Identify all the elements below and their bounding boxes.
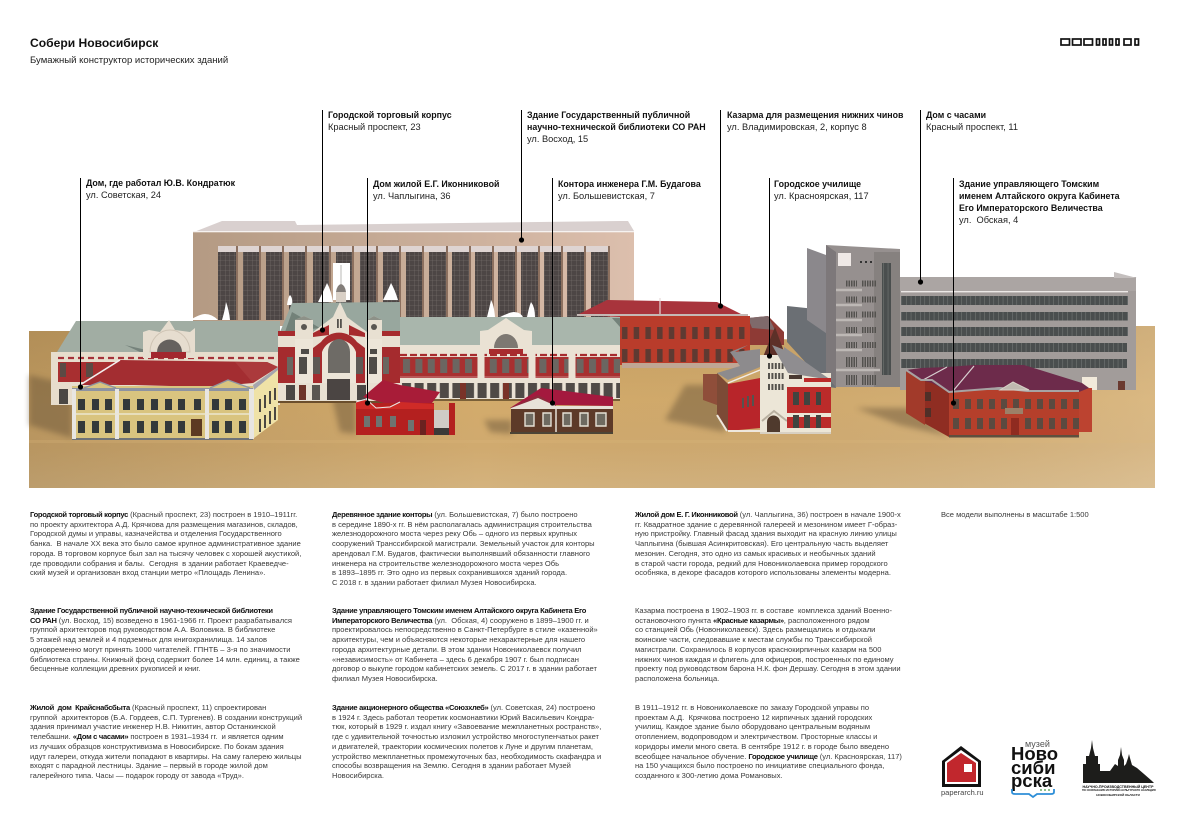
- label: Kondratyuk house: ул. Советская, 24: [86, 190, 161, 200]
- logo: paperarch: [941, 746, 984, 797]
- text: clock house: Жилой дом Крайснабсбыта (Красный проспект, 11) спроектирован: [30, 703, 266, 712]
- text: wooden office: арендовал Г.М. Будагов, фактически выполнявший обязанности главного: [332, 549, 590, 558]
- text: barracks: магистрали. Сохранилось 8 корпусов краснокирпичных казарм на 500: [635, 645, 881, 654]
- logo: scientific production centre: ПО СОХРАНЕНИЮ ИСТОРИКО-КУЛЬТУРНОГО НАСЛЕДИЯ: [1082, 789, 1156, 792]
- text: clock house: входят с парадной лестницы. Здание – первый в городе жилой дом: [30, 761, 268, 770]
- label: barracks: Казарма для размещения нижних чинов: [727, 110, 903, 120]
- leader: contractor's office: [550, 178, 555, 406]
- text: wooden office: в 1893–1895 гг. Это одно из первых сохранившихся зданий города.: [332, 568, 567, 577]
- text: Soyuzkhleb: в 1924 г. Здесь работал теоретик космонавтики Юрий Васильевич Кондра-: [332, 713, 594, 722]
- building: trade corps left wing: [51, 320, 280, 405]
- text: city school: проектам А.Д. Крячкова построено 12 кирпичных зданий городских: [635, 713, 872, 722]
- leader: Ikonnikova house: [365, 178, 370, 406]
- text: trade corps: [30, 510, 301, 577]
- text: trade corps: Городской торговый корпус (Красный проспект, 23) построен в 1910–1911гг.: [30, 510, 297, 519]
- text: barracks: нижних чинов каждая и флигель для офицеров, построенных по единому: [635, 655, 894, 664]
- building: trade corps central block: [278, 265, 400, 403]
- label: clock house: [926, 110, 1018, 132]
- logo: paperarch: paperarch.ru: [941, 788, 984, 797]
- title: Собери Новосибирск: [30, 36, 158, 50]
- text: Soyuzkhleb: способы возвращения на Землю. Сегодня в здании работает Музей: [332, 761, 571, 770]
- text: city school: В 1911–1912 гг. в Новониколаевске по заказу Городской управы по: [635, 703, 869, 712]
- leader: clock house: [918, 110, 923, 285]
- label: Altai Okrug office: Его Императорского Величества: [959, 203, 1103, 213]
- text: clock house: здания принимал участие инженер Н.В. Никитин, автор Останкинской: [30, 722, 276, 731]
- text: trade corps: где проводили собрания и балы. Сегодня в здании работает Краеведче-: [30, 559, 289, 568]
- label: barracks: [727, 110, 904, 132]
- logo: Museum of Novosibirsk: рска: [1011, 770, 1052, 791]
- cupola: [336, 265, 346, 302]
- text: Altai Okrug office: архитектуры, чем и объясняются некоторые нехарактерные для нашего: [332, 635, 585, 644]
- text: Ikonnikova house: ную пристройку. Главный фасад здания выходит на красную линию улицы: [635, 529, 897, 538]
- text: library: библиотека страны. Книжный фонд содержит более 14 млн. единиц, а также: [30, 655, 300, 664]
- text: city school: всеобщее начальное обучение. Городское училище (ул. Красноярская, 117): [635, 752, 902, 761]
- label: clock house: Дом с часами: [926, 110, 986, 120]
- label: trade corps: Городской торговый корпус: [328, 110, 452, 120]
- text: clock house: идут галереи, откуда жители попадают в квартиры. На саму галерею жильцы: [30, 752, 302, 761]
- label: Altai Okrug office: ул. Обская, 4: [959, 215, 1018, 225]
- building: yellow house Kondratyuk: [72, 360, 278, 440]
- label: barracks: ул. Владимировская, 2, корпус 8: [727, 122, 867, 132]
- leader: trade corps: [320, 110, 325, 333]
- building: red Altai Okrug office: [906, 365, 1092, 438]
- text: Soyuzkhleb: Здание акционерного общества «Союзхлеб» (ул. Советская, 24) построено: [332, 703, 595, 712]
- label: library: ул. Восход, 15: [527, 134, 588, 144]
- text: barracks: расположена больница.: [635, 674, 719, 683]
- text: wooden office: инженера на строительстве железнодорожного моста через Обь: [332, 559, 559, 568]
- text: trade corps: ский музей и организован вход станции метро «Площадь Ленина».: [30, 568, 265, 577]
- leader: library: [519, 110, 524, 243]
- text: library: одновременно могут принять 1000 читателей. ГПНТБ – 3-я по значимости: [30, 645, 291, 654]
- building: city school: [703, 327, 831, 434]
- arched dormer: [480, 318, 532, 354]
- white gaps behind central roof: [190, 263, 535, 320]
- leader: Altai Okrug office: [951, 178, 956, 406]
- text: barracks: [635, 606, 901, 683]
- text: city school: отоплением, водопроводом и электричеством. Просторные классы и: [635, 732, 877, 741]
- text: Altai Okrug office: [332, 606, 598, 683]
- text: clock house: из лучших образцов конструктивизма в Новосибирске. По бокам здания: [30, 742, 284, 751]
- label: contractor's office: ул. Большевистская, 7: [558, 191, 655, 201]
- text: city school: созданного к 300-летию дома Романовых.: [635, 771, 783, 780]
- logo: scientific production centre: НОВОСИБИРСКОЙ ОБЛАСТИ: [1096, 793, 1140, 797]
- label: school: [774, 179, 869, 201]
- label: library: научно-технической библиотеки СО РАН: [527, 122, 706, 132]
- text: trade corps: по проекту архитектора А.Д. Крячкова для размещения магазинов, складов,: [30, 520, 298, 529]
- label: library: Здание Государственный публичной: [527, 110, 690, 120]
- label: Kondratyuk house: [86, 178, 235, 200]
- text: library: [30, 606, 300, 673]
- clock face: [838, 253, 851, 266]
- library windows: [218, 246, 609, 320]
- logo: scientific production centre: НАУЧНО-ПРОИЗВОДСТВЕННЫЙ ЦЕНТР: [1082, 785, 1153, 789]
- label: clock house: Красный проспект, 11: [926, 122, 1018, 132]
- text: barracks: Казарма построена в 1902–1903 гг. в составе комплекса зданий Военно-: [635, 606, 892, 615]
- text: library: Здание Государственной публичной научно-технической библиотеки: [30, 606, 273, 615]
- label: library: [527, 110, 706, 144]
- text: clock house: телебашни. «Дом с часами» построен в 1931–1934 гг. и является одним: [30, 732, 284, 741]
- text: trade corps: Городской думы и управы, казначейства и отделения Государственного: [30, 529, 282, 538]
- label: Kondratyuk house: Дом, где работал Ю.В. Кондратюк: [86, 178, 235, 188]
- text: library: 5 этажей над землей и 4 подземных для книгохранилища. 14 залов: [30, 635, 267, 644]
- arched dormer: [143, 320, 195, 358]
- text: Ikonnikova house: в старой части города, редкий для Новониколаевска пример городского: [635, 559, 888, 568]
- text: Soyuzkhleb: устройство межпланетных промежуточных баз, необходимость скафандра и: [332, 752, 601, 761]
- label: trade corps: Красный проспект, 23: [328, 122, 421, 132]
- text: Altai Okrug office: договор о выкупе городом кабинетских земель. С 2017 г. в здании работает: [332, 664, 597, 673]
- label: Ikonnikova house: ул. Чаплыгина, 36: [373, 191, 451, 201]
- text: Soyuzkhleb: [332, 703, 601, 780]
- leader lines with dots: [78, 110, 956, 406]
- text: library: СО РАН (ул. Восход, 15) возведено в 1961-1966 гг. Проект разрабатывался: [30, 616, 292, 625]
- text: trade corps: банка. В начале XX века это было самое крупное административное здание: [30, 539, 301, 548]
- building: clock house (constructivist): [787, 245, 1137, 390]
- label: Ikonnikova house: Дом жилой Е.Г. Иконниковой: [373, 179, 499, 189]
- text: city school: коридоры имели много света. В сентябре 1912 г. в городе было введено: [635, 742, 889, 751]
- text: Altai Okrug office: Императорского Величества (ул. Обская, 4) сооружено в 1899–1900 гг. и: [332, 616, 589, 625]
- label: school: Городское училище: [774, 179, 861, 189]
- leader: school: [767, 178, 772, 359]
- text: wooden office: Деревянное здание конторы (ул. Большевистская, 7) было построено: [332, 510, 578, 519]
- text: clock house: галерейного типа. Часы — подарок городу от завода «Труд».: [30, 771, 244, 780]
- text: Altai Okrug office: Здание управляющего Томским именем Алтайского округа Кабинета Его: [332, 606, 586, 615]
- logo: Museum of Novosibirsk: музей: [1025, 739, 1050, 749]
- text: barracks: остановочного пункта «Красные казармы», расположенного рядом: [635, 616, 870, 625]
- label: Ikonnikova house: [373, 179, 499, 201]
- leader: barracks: [718, 110, 723, 309]
- leader: Kondratyuk house: [78, 178, 83, 390]
- text: library: группой архитекторов под руководством А.А. Воловика. В библиотеке: [30, 625, 275, 634]
- table top: [29, 326, 1155, 488]
- text: Soyuzkhleb: Новосибирска.: [332, 771, 384, 780]
- logo: scientific production centre: [1082, 740, 1156, 797]
- text: Soyuzkhleb: где с удивительной точностью изложил устройство многоступенчатых ракет: [332, 732, 599, 741]
- text: clock house: группой архитекторов (Б.А. Гордеев, С.П. Тургенев). В создании конструкций: [30, 713, 302, 722]
- icon: series marks: [1060, 38, 1140, 46]
- text: clock house: [30, 703, 302, 780]
- logo: Museum of Novosibirsk: [1011, 739, 1058, 798]
- text: wooden office: сооружений Транссибирской магистрали. Земельный участок для конторы: [332, 539, 595, 548]
- label: Altai Okrug office: [959, 179, 1120, 225]
- text: Altai Okrug office: филиал Музея Новосибирска.: [332, 674, 438, 683]
- building: wooden contractor's office: [510, 388, 613, 434]
- label: Altai Okrug office: именем Алтайского округа Кабинета: [959, 191, 1120, 201]
- building: small red house Ikonnikova: [356, 380, 455, 435]
- building: trade corps right wing: [400, 317, 620, 401]
- text: Altai Okrug office: проектировалось непосредственно в Санкт-Петербурге в стиле «казенной»: [332, 625, 598, 634]
- text: city school: училищ. Каждое здание было оборудовано центральным водяным: [635, 722, 870, 731]
- text: Ikonnikova house: мезонин. Сегодня, это одно из самых красивых и необычных зданий: [635, 549, 876, 558]
- subtitle: Бумажный конструктор исторических зданий: [30, 55, 228, 66]
- scale note: Все модели выполнены в масштабе 1:500: [941, 510, 1089, 519]
- text: Ikonnikova house: Чаплыгина (бывшая Асинкритовская). Его центральную часть выделяет: [635, 539, 888, 548]
- label: trade corps: [328, 110, 452, 132]
- text: barracks: воинские части, следовавшие к местам службы по Транссибирской: [635, 635, 872, 644]
- text: city school: на 150 учащихся было построено по инициативе специального фонда,: [635, 761, 884, 770]
- label: contractor's office: [558, 179, 701, 201]
- label: Altai Okrug office: Здание управляющего Томским: [959, 179, 1099, 189]
- logo: Museum of Novosibirsk: сиби: [1011, 756, 1055, 778]
- text: wooden office: железнодорожного моста через реку Обь – одного из первых крупных: [332, 529, 577, 538]
- text: city school: [635, 703, 902, 780]
- text: Ikonnikova house: [635, 510, 901, 577]
- building: red barracks: [577, 298, 784, 368]
- text: wooden office: С 2018 г. в здании работает филиал Музея Новосибирска.: [332, 578, 537, 587]
- text: library: бесценные коллекции древних рукописей и книг.: [30, 664, 200, 673]
- text: barracks: со станцией Обь (Новониколаевск). Здесь размещались и отдыхали: [635, 625, 875, 634]
- building: public library: [190, 221, 634, 326]
- label: school: ул. Красноярская, 117: [774, 191, 869, 201]
- text: Altai Okrug office: «независимость» от Кабинета – здесь 6 декабря 1907 г. был подписан: [332, 655, 579, 664]
- text: Soyuzkhleb: и двигателей, траектории космических полетов к Луне и другим планетам,: [332, 742, 593, 751]
- logo: Museum of Novosibirsk: Ново: [1011, 743, 1058, 764]
- text: Ikonnikova house: гг. Квадратное здание с деревянной галереей и мезонином имеет Г-образ-: [635, 520, 897, 529]
- label: contractor's office: Контора инженера Г.М. Будагова: [558, 179, 701, 189]
- text: wooden office: [332, 510, 595, 587]
- text: Ikonnikova house: особняка, в декоре фасадов которого использованы элементы модерна.: [635, 568, 891, 577]
- text: Altai Okrug office: города архитектурные детали. В этом здании Новониколаевск получил: [332, 645, 582, 654]
- text: wooden office: в середине 1890-х гг. В нём располагалась администрация строительства: [332, 520, 592, 529]
- text: Soyuzkhleb: тюк, который в 1929 г. издал книгу «Завоевание межпланетных ространств»,: [332, 722, 601, 731]
- text: Ikonnikova house: Жилой дом Е. Г. Иконниковой (ул. Чаплыгина, 36) построен в начале 1900-х: [635, 510, 901, 519]
- text: barracks: проекту под руководством барона Н.К. фон Дершау. Сегодня в этом здании: [635, 664, 901, 673]
- shadows on table: [29, 375, 948, 438]
- text: trade corps: города. В торговом корпусе был зал на тысячу человек с хорошей акустикой,: [30, 549, 301, 558]
